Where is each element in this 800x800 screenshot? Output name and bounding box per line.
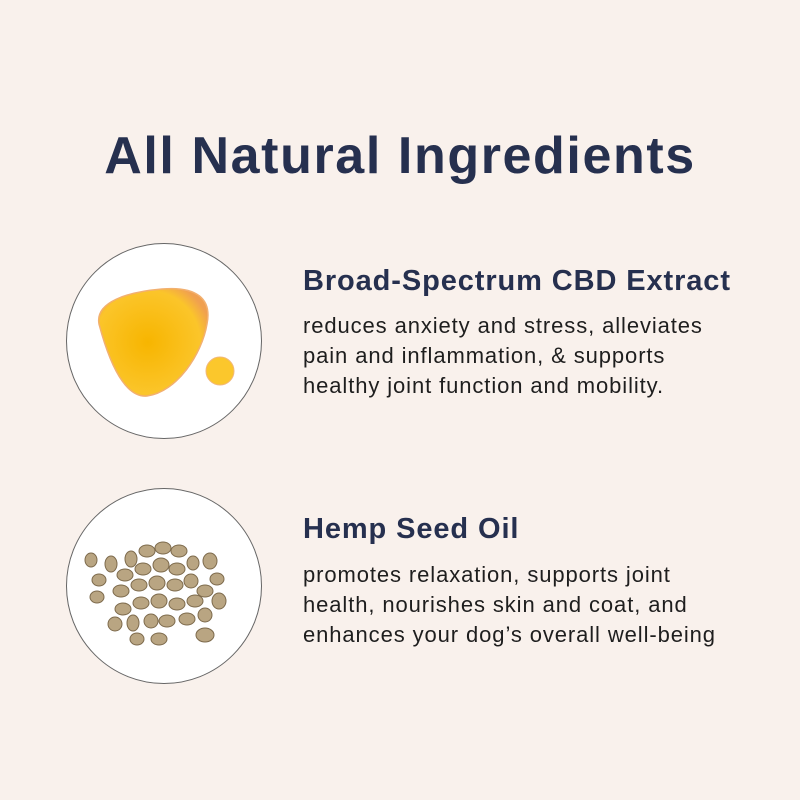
text: hemp description: [303, 562, 716, 647]
text: hemp description: enhances your dog’s overall well-being: [303, 622, 716, 647]
text: CBD description: healthy joint function and mobility.: [303, 373, 664, 398]
icon: hemp seeds circle: [66, 488, 262, 684]
text: CBD description: pain and inflammation, & supports: [303, 343, 665, 368]
text: hemp description: health, nourishes skin and coat, and: [303, 592, 688, 617]
heading: CBD: Broad-Spectrum CBD Extract: [303, 265, 731, 297]
title: All Natural Ingredients: [104, 127, 696, 185]
heading: hemp: Hemp Seed Oil: [303, 513, 519, 545]
icon: oil drop circle: [66, 243, 262, 439]
text: CBD description: [303, 313, 703, 398]
text: CBD description: reduces anxiety and stress, alleviates: [303, 313, 703, 338]
text: hemp description: promotes relaxation, supports joint: [303, 562, 671, 587]
